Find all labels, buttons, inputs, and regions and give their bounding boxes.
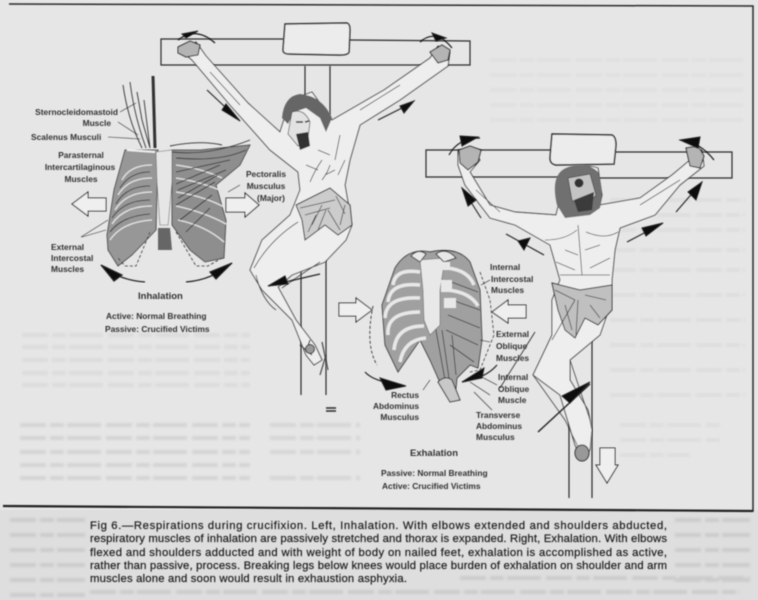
caption: respiratory muscles of inhalation are passively stretched and thorax is expanded. Right, Exhalation. With elbows: [90, 533, 667, 545]
labels: inhalation muscles: Scalenus Musculi: [31, 132, 101, 142]
labels: exhalation muscles: Internal: [490, 262, 520, 272]
caption: rather than passive, process. Breaking legs below knees would place burden of exhalation on shoulder and arm: [90, 560, 667, 572]
exhalation notes: [381, 468, 488, 491]
inhalation notes: [105, 311, 210, 334]
labels: inhalation muscles: Musculus: [247, 181, 286, 191]
right figure motion arrows: [449, 136, 714, 432]
right figure: exhalation body: [458, 146, 704, 461]
labels: inhalation muscles: Sternocleidomastoid: [35, 107, 118, 117]
left ribcage sternum: [156, 150, 172, 225]
left ribcage ribs: [110, 165, 226, 242]
right ribcage sternum: [420, 258, 445, 335]
caption: flexed and shoulders adducted and with weight of body on nailed feet, exhalation is accomplished as active,: [90, 547, 667, 559]
right ribcage white ribs: [385, 268, 478, 362]
right figure hair and face: [555, 165, 602, 218]
labels: exhalation muscles: Oblique: [498, 384, 530, 394]
block arrow: rib compression from right: [492, 300, 526, 323]
left figure: inhalation body: [178, 41, 450, 375]
caption: muscles alone and soon would result in exhaustion asphyxia.: [90, 573, 407, 585]
left cross title plaque: [283, 23, 350, 55]
labels: exhalation muscles: Muscles: [491, 285, 524, 295]
left figure hair and face: [282, 94, 332, 132]
labels: exhalation muscles: Muscles: [496, 353, 529, 363]
labels: exhalation muscles: Muscle: [498, 395, 527, 405]
labels: inhalation muscles: Parasternal: [58, 150, 104, 160]
labels: exhalation muscles: Internal: [498, 372, 528, 382]
exhalation notes: Active: Crucified Victims: [382, 481, 481, 491]
inhalation notes: Passive: Crucified Victims: [105, 324, 210, 334]
right ribcage: thorax in exhalation: [382, 250, 482, 402]
exhalation notes: Passive: Normal Breathing: [381, 468, 488, 478]
right figure hands: [459, 146, 481, 170]
left ribcage: thorax in inhalation: [107, 76, 250, 266]
labels: exhalation muscles: External: [496, 329, 529, 339]
block arrow: body weight downward: [596, 448, 618, 483]
labels: exhalation muscles: Abdominus: [373, 401, 419, 411]
right cross: [426, 134, 732, 498]
left cross: [161, 23, 470, 411]
labels: inhalation muscles: Muscles: [64, 174, 98, 184]
labels: exhalation muscles: [373, 262, 533, 442]
labels: exhalation muscles: Musculus: [476, 432, 515, 442]
labels: inhalation muscles: (Major): [257, 193, 285, 203]
leader lines, left labels: [81, 103, 240, 237]
labels: inhalation muscles: Pectoralis: [246, 169, 286, 179]
labels: exhalation muscles: Oblique: [496, 341, 528, 351]
block arrow: left outward: [72, 192, 106, 216]
labels: exhalation muscles: Intercostal: [491, 274, 533, 284]
left figure motion arrows: [178, 31, 452, 286]
labels: exhalation muscles: Rectus: [391, 390, 419, 400]
inhalation heading: Inhalation: [138, 291, 183, 302]
right figure loincloth: [552, 283, 612, 338]
block arrow: rib compression from left: [339, 298, 372, 322]
labels: exhalation muscles: Musculus: [380, 412, 419, 422]
labels: exhalation muscles: Abdominus: [476, 421, 522, 431]
inhalation notes: Active: Normal Breathing: [106, 311, 207, 321]
labels: inhalation muscles: Intercartilaginous: [45, 162, 115, 172]
labels: inhalation muscles: External: [51, 242, 84, 252]
left thorax curved arrows: [101, 263, 232, 282]
right figure torso shading: [476, 180, 680, 275]
labels: inhalation muscles: Intercostal: [51, 253, 93, 263]
right thorax dashed outline and curved arrows: [365, 272, 497, 410]
exhalation heading: Exhalation: [410, 448, 458, 459]
labels: inhalation muscles: [31, 107, 286, 274]
caption: [90, 520, 667, 585]
left figure loincloth: [296, 188, 352, 240]
labels: inhalation muscles: Muscle: [83, 118, 111, 128]
labels: inhalation muscles: Muscles: [51, 264, 84, 274]
lower dashed diaphragm: [118, 232, 222, 266]
neck muscles: [123, 76, 250, 159]
left figure hands: [178, 41, 200, 57]
right cross title plaque: [550, 134, 616, 165]
labels: exhalation muscles: Transverse: [476, 410, 521, 420]
block arrow: right outward: [226, 193, 259, 217]
caption: Fig 6.—Respirations during crucifixion. Left, Inhalation. With elbows extended and shoulders abducted,: [90, 520, 667, 532]
